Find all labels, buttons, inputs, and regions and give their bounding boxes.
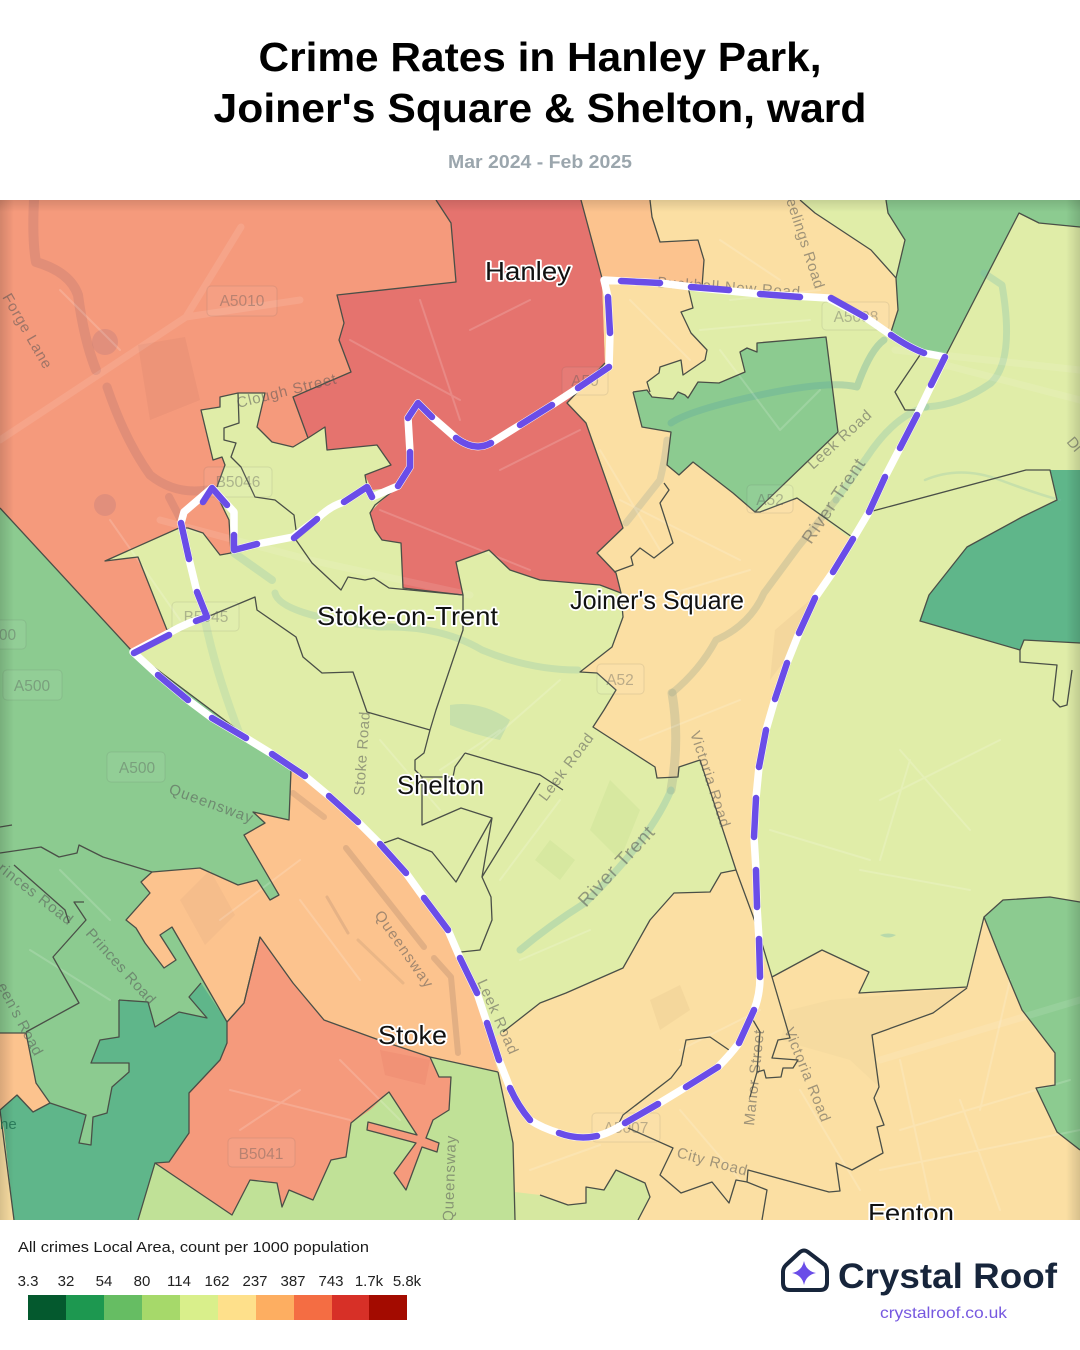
area: mid-green north-east (886, 200, 1080, 355)
title (214, 34, 866, 131)
road and river labels: ne (0, 1116, 17, 1133)
streets (0, 227, 1080, 1210)
road shields: A52 (756, 492, 784, 509)
legend scale labels: 162 (204, 1273, 230, 1290)
road shields: B5045 (184, 609, 228, 626)
road shields: A5007 (604, 1120, 648, 1137)
road and river labels: Forge Lane (0, 290, 55, 372)
road and river labels: Queensway (371, 908, 437, 991)
road shields (0, 286, 889, 1167)
legend scale labels: 237 (242, 1273, 268, 1290)
place labels: Fenton (868, 1198, 954, 1228)
road shields: A50 (571, 373, 599, 390)
road and river labels: Princes Road (82, 925, 159, 1008)
legend scale labels (18, 1273, 422, 1290)
area: peach south-west corner (0, 1033, 50, 1112)
road shields: A500 (119, 760, 155, 777)
area: red Hanley (293, 200, 623, 595)
legend scale labels: 3.3 (18, 1273, 38, 1290)
area: peach north centre (581, 200, 704, 287)
area: beige centre and south (490, 280, 1080, 1220)
area: mid-green south-east (984, 897, 1080, 1150)
road and river labels: Victoria Road (780, 1025, 834, 1124)
legend scale labels: 5.8k (393, 1273, 422, 1290)
ward outline: purple dashes (134, 281, 945, 1137)
area: salmon Stoke south (155, 937, 451, 1215)
road and river labels: City Road (675, 1144, 749, 1179)
road and river labels: Queensway (440, 1135, 460, 1222)
legend scale labels: 32 (58, 1273, 74, 1290)
ward boundaries (0, 200, 1080, 1220)
map edge shading (0, 200, 1080, 1220)
area: darker beige patch (780, 988, 967, 1087)
brand name: Crystal Roof (838, 1257, 1057, 1296)
ward outline: white base line (133, 280, 945, 1137)
legend scale labels: 80 (134, 1273, 150, 1290)
legend scale labels: 387 (280, 1273, 306, 1290)
legend scale labels: 1.7k (355, 1273, 384, 1290)
road and river labels: Leek Road (473, 977, 521, 1057)
road shields: B5046 (216, 474, 260, 491)
title: Joiner's Square & Shelton, ward (214, 85, 866, 131)
area: mid-green south-west (0, 509, 290, 1144)
title: Crime Rates in Hanley Park, (258, 34, 822, 80)
road and river labels: Stoke Road (351, 711, 374, 796)
legend scale labels: 114 (167, 1273, 191, 1290)
subtitle: date range: Mar 2024 - Feb 2025 (448, 152, 632, 172)
road and river labels: Manor Street (741, 1028, 768, 1126)
place labels: Shelton (397, 770, 484, 800)
area: peach Stoke (126, 770, 498, 1072)
base light-green areas (110, 200, 1080, 1182)
icon: house with star (783, 1250, 827, 1290)
road and river labels: Leek Road (804, 407, 875, 473)
road and river labels: Queensway (167, 781, 256, 827)
area: dark-green east (920, 470, 1080, 650)
road shields: A5010 (220, 293, 265, 310)
area: beige strip bottom-left (0, 1110, 14, 1220)
area: pale green south (138, 1057, 515, 1220)
road and river labels: eelings Road (782, 196, 827, 291)
area: beige north (650, 200, 898, 335)
place labels: Stoke-on-Trent (317, 601, 499, 631)
area: salmon north-west (0, 200, 456, 650)
road and river labels: Buckhall New Road (657, 274, 801, 301)
road and river labels: Leek Road (536, 730, 597, 804)
road shields: B5041 (239, 1146, 283, 1163)
website: crystalroof.co.uk (880, 1305, 1008, 1322)
legend (18, 1239, 422, 1320)
area: mid-green central (633, 337, 838, 512)
place labels (317, 256, 954, 1228)
road and river labels: River Trent (574, 822, 660, 911)
legend scale labels: 54 (96, 1273, 112, 1290)
legend scale labels: 743 (318, 1273, 344, 1290)
road and river labels (0, 196, 1080, 1222)
road shields: A5008 (834, 309, 878, 326)
rivers and canals (33, 200, 1060, 1053)
road and river labels: River Trent (798, 455, 869, 547)
land-use patches (92, 329, 690, 1056)
choropleth map (0, 196, 1080, 1228)
road shields: A52 (606, 672, 634, 689)
road and river labels: Victoria Road (686, 729, 733, 829)
place labels: Hanley (485, 256, 571, 286)
place labels: Joiner's Square (570, 585, 744, 615)
logo: Crystal Roof (783, 1250, 1057, 1322)
place labels: Stoke (378, 1020, 447, 1050)
road and river labels: Clough Street (235, 371, 339, 412)
area: dark-green Stoke west (0, 983, 227, 1220)
area: light green bottom (515, 1170, 650, 1220)
legend title: All crimes Local Area, count per 1000 population (18, 1239, 369, 1256)
legend colour bar (28, 1295, 407, 1320)
road shields: A500 (14, 678, 50, 695)
